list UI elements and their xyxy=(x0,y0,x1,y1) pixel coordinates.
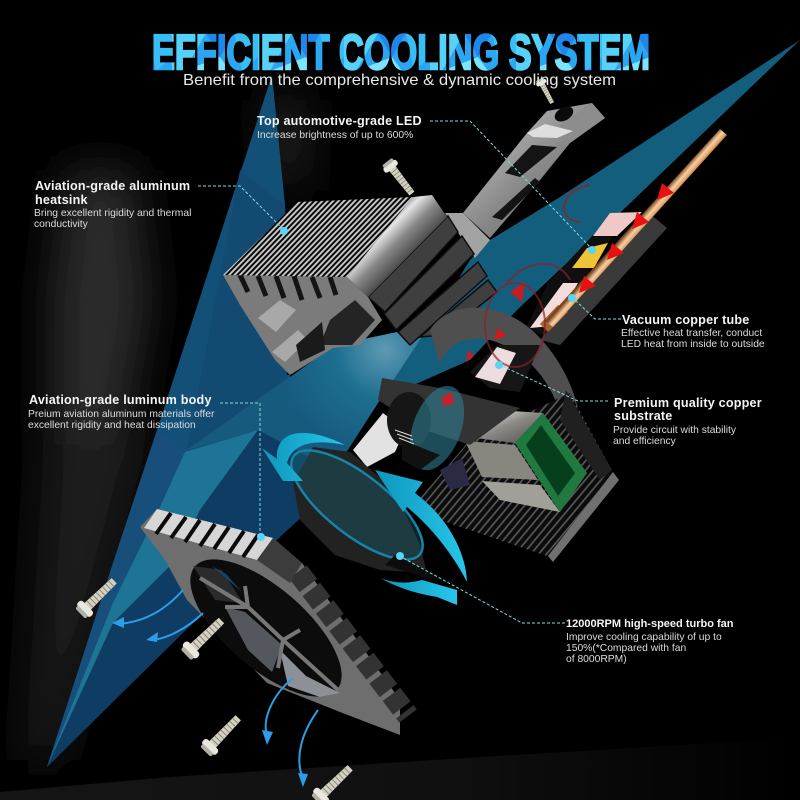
callout: turbo fan: Improve cooling capability of up to xyxy=(566,632,722,643)
LED bar xyxy=(430,129,727,420)
side fins xyxy=(368,216,497,345)
callout: heatsink xyxy=(34,179,288,235)
collar xyxy=(445,213,490,258)
callout: copper substrate: substrate xyxy=(614,409,672,423)
PCB and glass dome xyxy=(353,378,520,490)
callout: LED xyxy=(257,114,596,254)
callout: turbo fan: 12000RPM high-speed turbo fan xyxy=(566,618,734,630)
blue wedge left xyxy=(47,75,330,767)
background glow streaks xyxy=(25,100,305,760)
heatsink front fins xyxy=(223,275,382,375)
heatsink smooth top xyxy=(347,195,447,297)
callout: copper tube: LED heat from inside to outside xyxy=(621,339,765,350)
subtitle: Benefit from the comprehensive & dynamic cooling system xyxy=(183,72,616,89)
blue mid panel xyxy=(187,325,440,470)
callout: turbo fan: 150%(*Compared with fan xyxy=(566,643,686,654)
plate top teeth xyxy=(144,509,273,560)
lower heatsink xyxy=(410,390,619,562)
callout: copper substrate: and efficiency xyxy=(613,436,677,447)
callout: copper substrate: Provide circuit with stability xyxy=(613,425,737,436)
silver box xyxy=(458,408,560,512)
callout: LED: Increase brightness of up to 600% xyxy=(257,130,413,141)
callout: heatsink: Aviation-grade aluminum xyxy=(35,179,190,193)
bracket arm xyxy=(463,103,605,238)
callout: copper tube: Effective heat transfer, conduct xyxy=(621,328,762,339)
end plate xyxy=(140,509,408,735)
callout: heatsink: heatsink xyxy=(35,193,88,207)
fan airflow arrows xyxy=(262,433,467,605)
plate hole xyxy=(169,536,363,720)
callout: luminum body: Preium aviation aluminum materials offer xyxy=(28,409,215,420)
callout: copper tube: Vacuum copper tube xyxy=(622,313,749,327)
red arrows xyxy=(466,183,674,362)
screws xyxy=(74,77,557,800)
exhaust arrows xyxy=(118,590,318,778)
green connector xyxy=(515,413,587,512)
callout: luminum body: Aviation-grade luminum body xyxy=(29,393,212,407)
plate right teeth xyxy=(298,572,408,716)
callout: turbo fan: of 8000RPM) xyxy=(566,654,627,665)
screw: heatsink top xyxy=(381,157,418,199)
callout: turbo fan xyxy=(396,552,734,665)
callout: copper substrate xyxy=(495,361,762,447)
callout: luminum body xyxy=(28,393,265,541)
black panel under heatsink xyxy=(285,300,335,375)
callout: copper tube xyxy=(568,294,765,350)
callout: heatsink: Bring excellent rigidity and thermal xyxy=(34,208,191,219)
fan xyxy=(262,432,467,605)
plate body xyxy=(140,509,400,735)
heatsink top stripes xyxy=(223,197,413,277)
callout: LED: Top automotive-grade LED xyxy=(257,114,422,128)
callout: heatsink: conductivity xyxy=(34,219,89,230)
red heat swirls xyxy=(485,185,590,367)
floor band xyxy=(0,738,800,800)
exhaust arrow heads xyxy=(112,617,308,787)
heatsink assembly xyxy=(223,103,605,375)
callout: copper substrate: Premium quality copper xyxy=(614,396,762,410)
blue wedge right xyxy=(380,40,800,400)
copper tube xyxy=(545,129,727,327)
ring collar xyxy=(430,308,580,420)
callout: luminum body: excellent rigidity and heat dissipation xyxy=(28,420,196,431)
